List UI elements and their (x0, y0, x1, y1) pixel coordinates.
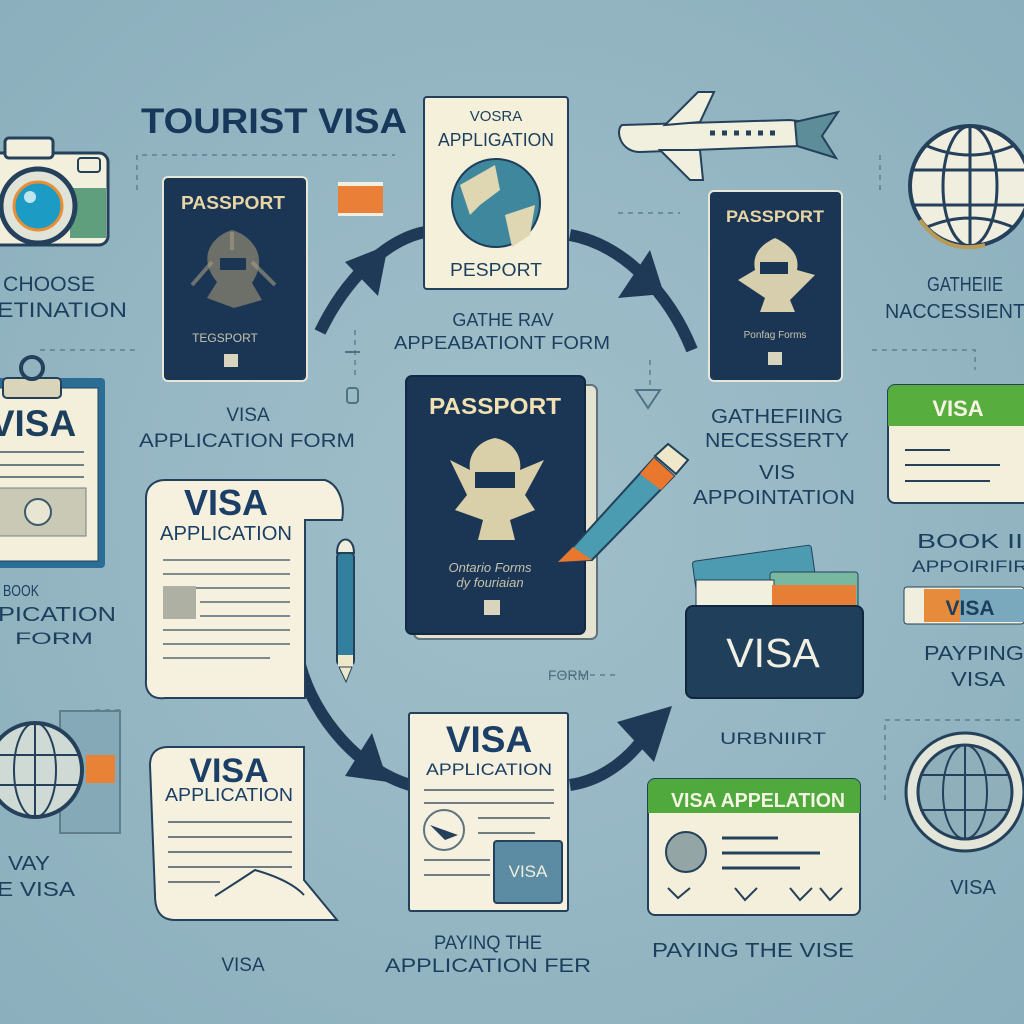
passport: upper left (163, 177, 307, 381)
document: visa application center bottom: APPLICATION (426, 760, 552, 779)
passport: upper right: Ponfag Forms (744, 330, 806, 341)
central passport (406, 376, 597, 639)
document: visa application center bottom: VISA (446, 719, 532, 760)
label: paying visa: VISA (951, 669, 1006, 691)
visa card: green header (888, 385, 1024, 503)
label: gather application form (394, 310, 610, 353)
passport: upper left: TEGSPORT (192, 331, 259, 345)
label: gather application form: APPEABATIONT FORM (394, 333, 610, 353)
visa application card green header: VISA APPELATION (671, 790, 845, 812)
central passport: PASSPORT (429, 393, 561, 419)
card: application with globe (424, 97, 568, 289)
visa payment card: VISA (945, 597, 995, 620)
central passport: Ontario Forms (448, 560, 532, 575)
label: book appointment: APPOIRIFIR (912, 557, 1024, 576)
passport: upper right: PASSPORT (726, 207, 825, 226)
title: TOURIST VISA (141, 102, 407, 141)
arrow: top right curve (570, 235, 692, 350)
document: visa application center bottom (409, 713, 568, 911)
label: choose destination: CHOOSE (3, 273, 95, 296)
label: gathering necessary visa appointment: APPOINTATION (693, 487, 855, 509)
icon: globe lower left (0, 711, 120, 833)
label: book application form: FORM (15, 629, 93, 648)
icon: small lock right (636, 390, 660, 408)
passport: upper right (709, 191, 842, 381)
label: visa application form (139, 405, 355, 452)
label: gathering necessary visa appointment: VIS (759, 462, 795, 484)
label: book application form: BOOK (3, 583, 39, 600)
icon: pen (558, 444, 688, 562)
label: pay the visa: VAY (8, 853, 50, 875)
label: paying the application fee: APPLICATION FER (385, 956, 591, 977)
label: paying the application fee: PAYINQ THE (434, 933, 542, 954)
label: book application form: PICATION (0, 604, 116, 626)
arrow: bottom right curve (570, 706, 672, 785)
icon: small lock left (345, 352, 360, 403)
visa card: green header: VISA (932, 396, 984, 421)
label: form: FORM (548, 667, 589, 683)
label: paying visa: PAYPING (924, 643, 1024, 665)
icon: clipboard visa form (0, 357, 105, 568)
card: application with globe: VOSRA (470, 108, 522, 125)
label: paying the visa: PAYING THE VISE (652, 940, 854, 962)
arrow: top left curve (320, 232, 425, 332)
visa payment card (904, 587, 1024, 624)
label: visa application form: APPLICATION FORM (139, 431, 355, 452)
document: scroll visa application: VISA (184, 482, 268, 523)
document: scroll visa application (146, 480, 343, 698)
icon: camera (0, 138, 108, 245)
icon: visa wallet (686, 545, 863, 698)
passport: upper left: PASSPORT (181, 193, 285, 213)
label: book appointment: BOOK II (917, 531, 1023, 553)
small orange tag (338, 182, 383, 216)
label: urbnirt: URBNIIRT (720, 729, 826, 748)
document: scroll visa application: APPLICATION (160, 523, 292, 545)
central passport: dy fouriaian (456, 575, 524, 590)
card: application with globe: PESPORT (450, 260, 542, 280)
label: gather application form: GATHE RAV (452, 310, 554, 330)
label: paying visa (924, 643, 1024, 691)
icon: airplane (619, 92, 838, 180)
visa application card green header (648, 779, 860, 915)
label: visa lower left: VISA (221, 955, 265, 976)
label: visa lower right: VISA (950, 877, 996, 899)
label: gather necessities (885, 274, 1024, 323)
label: gather necessities: NACCESSIENT (885, 301, 1024, 323)
icon: globe upper right (910, 126, 1024, 247)
label: pay the visa (0, 853, 76, 901)
card: application with globe: APPLIGATION (438, 130, 554, 150)
arrow: bottom left curve (300, 665, 410, 785)
icon: blue pen vertical (337, 540, 354, 682)
label: book application form (0, 583, 116, 648)
label: visa application form: VISA (226, 405, 270, 426)
label: gathering necessary visa appointment: NECESSERTY (705, 430, 849, 452)
document: visa application lower left: APPLICATION (165, 785, 293, 805)
document: visa application center bottom: VISA (509, 862, 548, 881)
label: book appointment (912, 531, 1024, 576)
label: gathering necessary visa appointment (693, 406, 855, 509)
label: choose destination: ETINATION (0, 299, 127, 322)
icon: globe lower right (906, 733, 1024, 851)
icon: visa wallet: VISA (726, 630, 820, 676)
label: paying the application fee (385, 933, 591, 977)
document: visa application lower left: VISA (189, 752, 269, 790)
document: visa application lower left (150, 747, 337, 920)
label: gather necessities: GATHEIIE (927, 274, 1003, 296)
label: choose destination (0, 273, 127, 322)
label: gathering necessary visa appointment: GATHEFIING (711, 406, 843, 428)
